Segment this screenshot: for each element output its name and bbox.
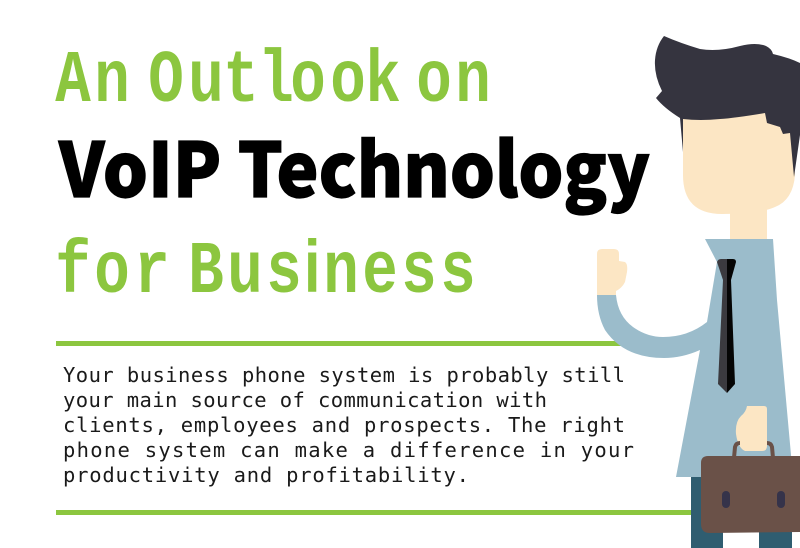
bottom green rule (56, 510, 696, 515)
title line: VoIP Technology: VoIP Technology (58, 110, 650, 219)
intro paragraph: your main source of communication with (63, 388, 547, 412)
briefcase (701, 456, 800, 533)
intro paragraph: Your business phone system is probably still (63, 363, 625, 387)
briefcase handle (734, 443, 773, 458)
title line: for Business: for Business (55, 226, 476, 315)
legs (691, 470, 792, 548)
shirt and raised arm (597, 239, 793, 477)
briefcase clasps (722, 491, 785, 508)
intro paragraph: phone system can make a difference in your (63, 438, 634, 462)
title line: An Outlook on: An Outlook on (55, 40, 491, 124)
hand holding briefcase (736, 406, 767, 451)
intro paragraph (63, 363, 634, 487)
intro paragraph: clients, employees and prospects. The right (63, 413, 625, 437)
illustration: businessman with briefcase (597, 36, 800, 548)
neck (730, 205, 767, 243)
intro paragraph: productivity and profitability. (63, 463, 469, 487)
tie (717, 259, 736, 393)
top green rule (56, 341, 656, 346)
raised fist (597, 249, 627, 295)
hair (655, 36, 800, 177)
face (683, 110, 795, 214)
